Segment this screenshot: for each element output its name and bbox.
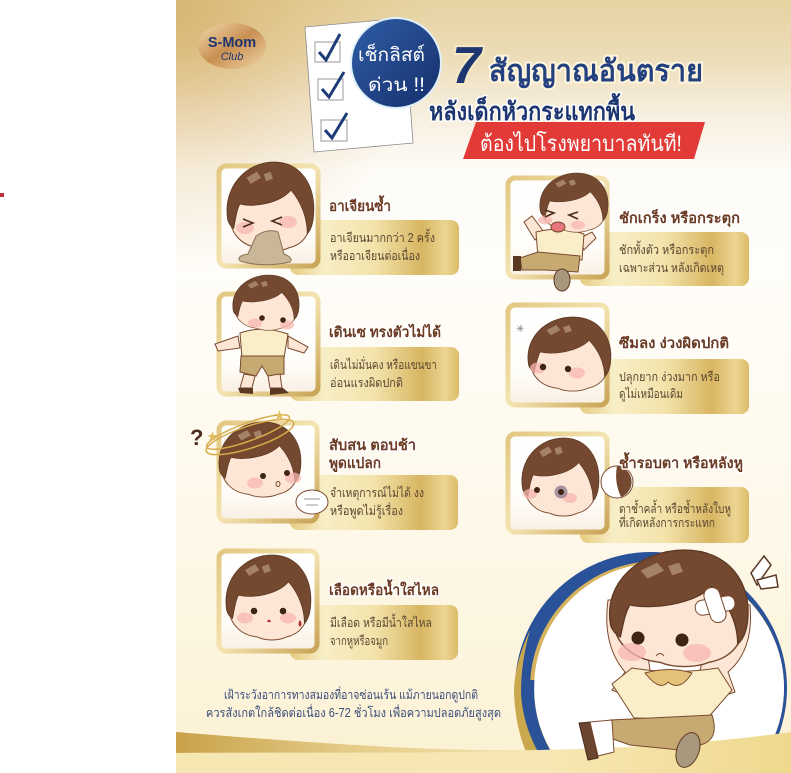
note text: เฝ้าระวังอาการทางสมองที่อาจซ่อนเร้น แม้ภายนอกดูปกติ [224,686,478,703]
card: vomiting [219,162,459,275]
title: 7 [452,37,483,95]
card: bleeding or clear fluid: มีเลือด หรือมีน้ำใสไหล [330,613,432,630]
card: bleeding or clear fluid [219,551,458,660]
badge: urgent checklist: ด่วน !! [368,75,425,96]
card: drowsy: ซึมลง ง่วงผิดปกติ [619,335,729,352]
card: drowsy [508,305,749,414]
title: หลังเด็กหัวกระแทกพื้น [429,92,635,126]
card: confused: จำเหตุการณ์ไม่ได้ งง [330,486,424,501]
logo: S-Mom Club [198,23,266,69]
card: drowsy: ✳ [516,324,524,335]
card: bruising: ที่เกิดหลังการกระแทก [619,514,715,530]
card: confused: สับสน ตอบช้า [329,437,416,454]
card: confused: ★ [207,431,218,443]
card: unsteady walking: เดินไม่มั่นคง หรือแขนขา [330,356,437,372]
card: unsteady walking [215,275,459,401]
card: confused: หรือพูดไม่รู้เรื่อง [330,502,403,519]
card: confused: พูดแปลก [329,456,381,472]
card: seizure: ชักทั้งตัว หรือกระตุก [619,240,714,258]
card: vomiting: อาเจียนซ้ำ [329,195,391,215]
card: vomiting: อาเจียนมากกว่า 2 ครั้ง [330,228,435,245]
main boy illustration [579,550,778,771]
note text [206,686,501,721]
floor [176,732,791,773]
card: bruising [508,434,749,543]
red banner: ต้องไปโรงพยาบาลทันที! [480,131,682,156]
background [176,0,791,773]
card: confused: ? [190,425,203,450]
card: unsteady walking: อ่อนแรงผิดปกติ [330,376,403,390]
card: bruising: ช้ำรอบตา หรือหลังหู [619,452,743,472]
card: seizure: เฉพาะส่วน หลังเกิดเหตุ [619,261,724,276]
card: drowsy: ดูไม่เหมือนเดิม [619,387,683,402]
card: bruising: ตาช้ำคล้ำ หรือช้ำหลังใบหู [619,499,731,517]
card: seizure: ชักเกร็ง หรือกระตุก [619,208,740,227]
card: drowsy: ปลุกยาก ง่วงมาก หรือ [619,370,720,385]
red banner [463,122,705,159]
logo: S-Mom Club: Club [221,51,243,63]
card: unsteady walking: เดินเซ ทรงตัวไม่ได้ [329,323,441,341]
card: seizure [508,173,749,291]
title: สัญญาณอันตราย [489,55,703,89]
card: confused: ★ [274,410,285,422]
card: confused [190,408,458,530]
badge: urgent checklist: เช็กลิสต์ [358,42,425,66]
badge: urgent checklist [350,17,442,109]
card: vomiting: หรืออาเจียนต่อเนื่อง [330,247,420,263]
title [429,37,703,126]
card: bleeding or clear fluid: เลือดหรือน้ำใสไหล [329,579,439,599]
big circle ring [514,552,787,773]
note text: ควรสังเกตใกล้ชิดต่อเนื่อง 6-72 ชั่วโมง เพื่อความปลอดภัยสูงสุด [206,704,501,721]
checklist paper [305,18,413,152]
card: bleeding or clear fluid: จากหูหรือจมูก [330,634,388,649]
red dot [0,193,4,197]
logo: S-Mom Club: S-Mom [208,35,256,51]
